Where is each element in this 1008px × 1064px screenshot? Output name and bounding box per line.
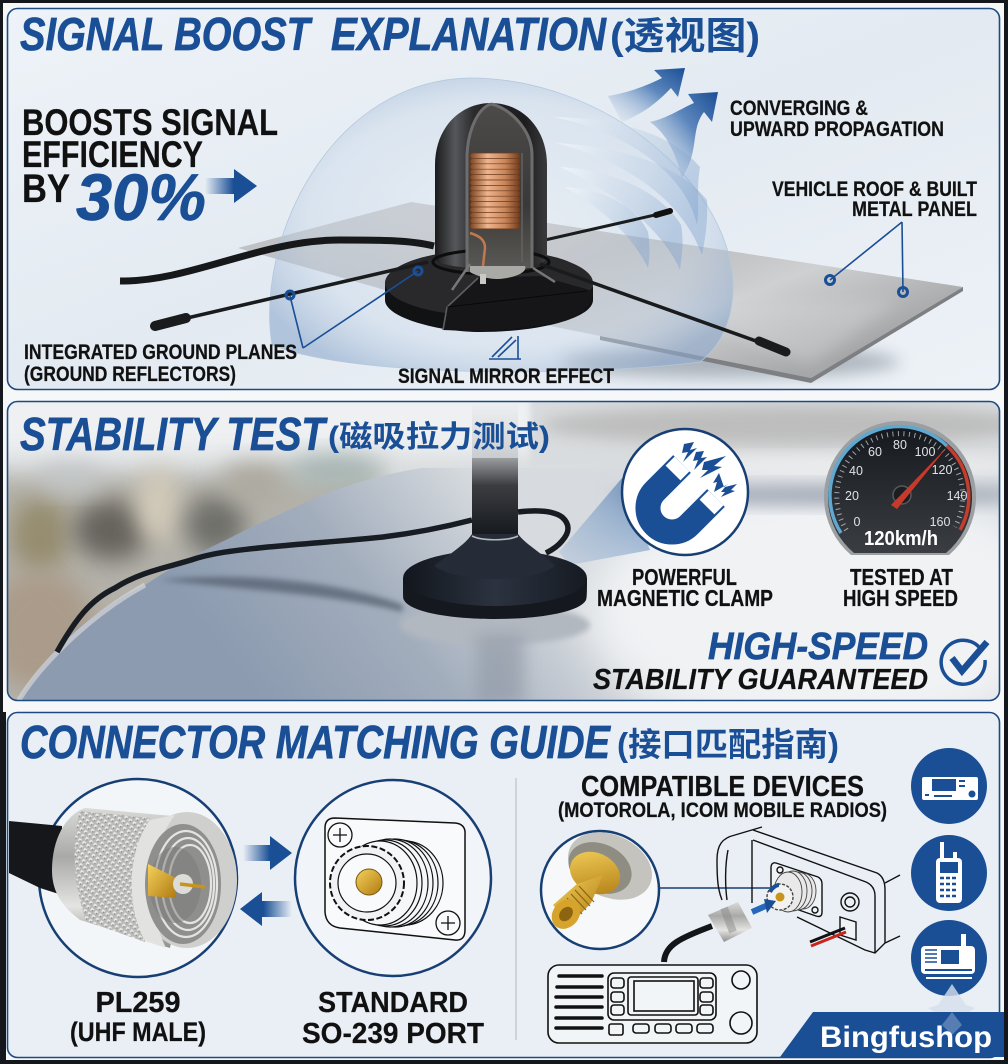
speedometer gauge: 80 (893, 438, 907, 452)
roof cable (57, 520, 472, 652)
title: connector matching guide: CONNECTOR MATCHING GUIDE (20, 716, 611, 768)
callout: signal mirror effect (398, 336, 614, 388)
SO-239 port on radio (767, 871, 816, 912)
car roof (20, 468, 624, 700)
heading: compatible devices: COMPATIBLE DEVICES (581, 771, 864, 803)
speedometer gauge: 40 (849, 464, 863, 478)
heading: compatible devices: (MOTOROLA, ICOM MOBILE RADIOS) (558, 799, 887, 822)
power leads (810, 928, 846, 946)
radio rear line art (717, 827, 900, 953)
icon circle: SO-239 port (295, 780, 491, 976)
threaded barrel (343, 839, 443, 927)
label: powerful magnetic clamp: MAGNETIC CLAMP (597, 585, 773, 611)
callout: boosts signal efficiency by 30%: BY (22, 167, 70, 211)
label: tested at high speed: TESTED AT (850, 564, 953, 590)
speedometer gauge: 60 (868, 445, 882, 459)
icon: marine radio (911, 920, 987, 996)
label: PL259: (UHF MALE) (70, 1017, 206, 1047)
label: standard SO-239 port (302, 987, 484, 1050)
label: standard SO-239 port: SO-239 PORT (302, 1018, 484, 1050)
callout: high-speed stability guaranteed (593, 626, 987, 696)
base (385, 250, 593, 332)
radome (435, 103, 547, 268)
icon: mobile radio (911, 748, 987, 824)
coax cable (9, 821, 62, 895)
callout: high-speed stability guaranteed: HIGH-SPEED (708, 626, 928, 668)
icon: check (941, 640, 987, 684)
icon circle: adapter close-up (541, 819, 663, 949)
speedometer gauge: 120km/h (864, 528, 938, 550)
cutaway antenna (385, 103, 593, 332)
title: stability test: (磁吸拉力测试) (328, 421, 550, 454)
callout: boosts signal efficiency by 30%: 30% (76, 160, 206, 234)
gold pin (148, 864, 176, 898)
projection beam (559, 478, 650, 565)
callout: signal mirror effect: SIGNAL MIRROR EFFECT (398, 365, 614, 388)
label: PL259 (70, 987, 206, 1047)
label: tested at high speed: HIGH SPEED (843, 585, 958, 611)
ground plane whips (155, 262, 786, 352)
screws (328, 823, 460, 935)
gauge needle (891, 446, 948, 509)
callout: integrated ground planes: INTEGRATED GROUND PLANES (24, 341, 297, 364)
connector body (52, 808, 195, 948)
speedometer gauge: 20 (845, 489, 859, 503)
blurred road background (8, 402, 626, 700)
callout: vehicle roof label: METAL PANEL (852, 198, 977, 221)
title: signal boost explanation: (透视图) (610, 16, 760, 58)
icon circle: PL259 connector (9, 779, 237, 977)
callout: converging label: CONVERGING & (730, 97, 868, 120)
brand banner: Bingfushop: Bingfushop (820, 1021, 992, 1054)
radio front line art (548, 965, 757, 1043)
title: stability test (20, 408, 550, 460)
callout: vehicle roof label (772, 178, 977, 296)
brand banner: Bingfushop (780, 1012, 1004, 1057)
leader line (659, 887, 770, 889)
label: tested at high speed (843, 564, 958, 611)
title: signal boost explanation: SIGNAL BOOST (20, 8, 313, 60)
speedometer gauge (824, 421, 976, 555)
icon: handheld radio (911, 835, 987, 911)
arrows: mating direction (240, 836, 292, 926)
front ring (137, 812, 237, 948)
magnetic mount antenna (403, 405, 587, 619)
callout: converging label (730, 97, 944, 141)
antenna feed cable (120, 240, 434, 281)
metal roof panel (238, 202, 963, 383)
speedometer gauge: 120 (932, 463, 952, 477)
speedometer gauge: 100 (915, 445, 935, 459)
panel: stability test (6, 400, 1000, 702)
callout: converging label: UPWARD PROPAGATION (730, 118, 944, 141)
callout: integrated ground planes (24, 267, 422, 386)
panel: connector matching guide (8, 712, 1004, 1058)
label: powerful magnetic clamp: POWERFUL (632, 564, 737, 590)
icon: magnetic clamp (622, 429, 748, 555)
title: connector matching guide: (接口匹配指南) (617, 726, 839, 763)
signal dome (270, 78, 733, 372)
speedometer gauge: 0 (854, 515, 861, 529)
callout: high-speed stability guaranteed: STABILITY GUARANTEED (593, 664, 928, 696)
rear whip (545, 211, 670, 240)
speedometer gauge: 140 (947, 489, 967, 503)
title: stability test: STABILITY TEST (20, 408, 328, 460)
label: standard SO-239 port: STANDARD (318, 987, 468, 1019)
title: signal boost explanation: EXPLANATION (331, 8, 607, 60)
callout: boosts signal efficiency by 30%: BOOSTS SIGNAL (22, 102, 278, 143)
decorative star overlay (928, 984, 975, 1030)
heading: compatible devices (558, 771, 887, 822)
title: signal boost explanation (20, 8, 760, 60)
coax plug and cable (664, 885, 779, 962)
panel: signal boost explanation (8, 8, 1000, 390)
arrow: right (205, 169, 257, 203)
speedometer gauge: 160 (930, 515, 950, 529)
callout: boosts signal efficiency by 30% (22, 102, 278, 234)
copper coil (470, 153, 520, 229)
cutaway opening (467, 104, 532, 272)
callout: integrated ground planes: (GROUND REFLECTORS) (24, 363, 236, 386)
label: PL259: PL259 (96, 987, 180, 1019)
upward propagation arrows and wave arcs (553, 68, 718, 270)
label: powerful magnetic clamp (597, 564, 773, 611)
callout: boosts signal efficiency by 30%: EFFICIENCY (22, 134, 203, 175)
